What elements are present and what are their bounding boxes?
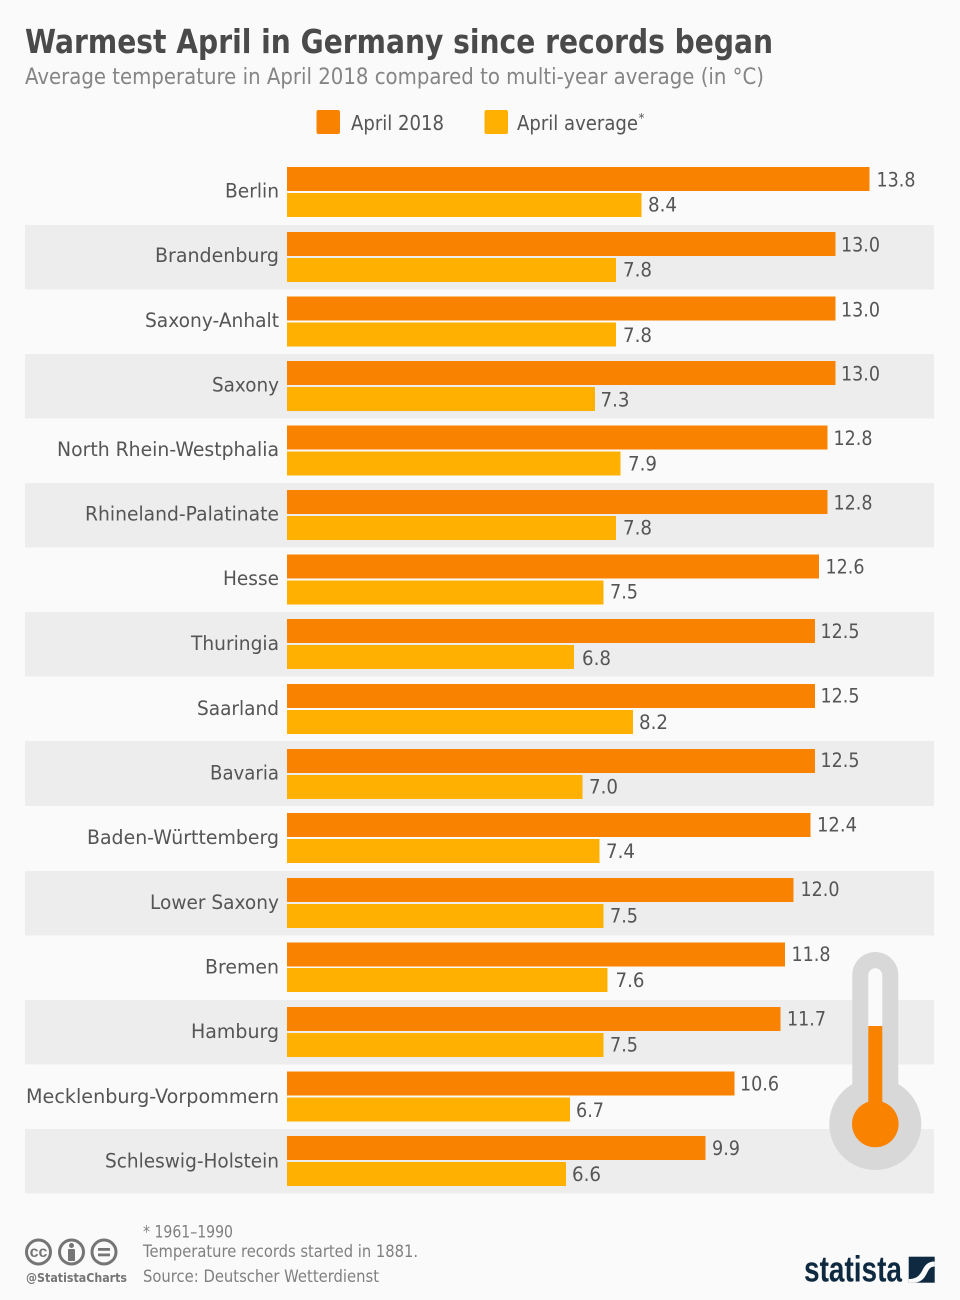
row: Saxony-Anhalt: Saxony-Anhalt [145, 309, 279, 332]
icon: thermometer [829, 952, 921, 1170]
row: Rhineland-Palatinate: Rhineland-Palatinate [85, 502, 279, 526]
row: Saarland: 12.5 [820, 684, 860, 708]
row: Baden-Württemberg: Baden-Württemberg [87, 826, 279, 849]
row: Bavaria: Bavaria [210, 762, 279, 784]
row: Lower Saxony [150, 878, 840, 928]
row: Lower Saxony: Lower Saxony [150, 891, 279, 914]
icon: creative commons badges: cc [30, 1244, 48, 1261]
row: Saarland: Saarland [197, 697, 279, 720]
legend: April average [517, 111, 638, 135]
row: Brandenburg: 7.8 [623, 258, 652, 282]
row: Thuringia: 6.8 [582, 647, 611, 670]
row: Saxony [212, 361, 880, 412]
footnotes: * 1961–1990 [143, 1222, 233, 1242]
row: Baden-Württemberg [87, 813, 857, 863]
row: Saxony-Anhalt [145, 296, 880, 347]
row: Lower Saxony: 12.0 [800, 878, 840, 901]
row: Mecklenburg-Vorpommern: 10.6 [740, 1072, 779, 1096]
row: Bremen: 7.6 [616, 969, 644, 992]
row: North Rhein-Westphalia: 7.9 [628, 452, 657, 476]
row: Baden-Württemberg: 7.4 [606, 840, 635, 863]
row: Schleswig-Holstein: Schleswig-Holstein [105, 1150, 279, 1172]
row: Rhineland-Palatinate: 12.8 [834, 492, 872, 514]
row: Hamburg: 7.5 [610, 1034, 638, 1056]
row: Brandenburg [155, 232, 880, 282]
row: Saxony-Anhalt: 7.8 [623, 324, 652, 347]
row: Bremen: 11.8 [792, 943, 830, 966]
row: Hesse: 7.5 [610, 580, 638, 604]
row: Hesse: Hesse [223, 567, 279, 590]
legend [316, 110, 644, 135]
row: Bremen [205, 942, 830, 992]
row: Thuringia: 12.5 [820, 620, 860, 643]
row: Schleswig-Holstein [105, 1136, 740, 1186]
row: Rhineland-Palatinate [85, 490, 872, 540]
legend: * [638, 111, 644, 125]
row: Saxony: 7.3 [600, 388, 630, 412]
row: Saxony-Anhalt: 13.0 [841, 298, 880, 322]
row: Baden-Württemberg: 12.4 [817, 814, 857, 836]
row: Lower Saxony: 7.5 [610, 904, 638, 928]
row stripes [25, 225, 934, 1194]
subtitle: Average temperature in April 2018 compared to multi-year average (in °C) [25, 65, 764, 90]
row: Berlin: Berlin [225, 180, 279, 202]
bar chart [26, 167, 916, 1186]
row: North Rhein-Westphalia [57, 426, 872, 476]
row: Bavaria: 12.5 [820, 749, 860, 772]
row: Rhineland-Palatinate: 7.8 [623, 516, 652, 540]
row: Mecklenburg-Vorpommern: 6.7 [576, 1099, 604, 1122]
row: Berlin [225, 167, 916, 217]
row: Hamburg [191, 1007, 826, 1057]
row: Thuringia [190, 619, 859, 670]
row: Mecklenburg-Vorpommern: Mecklenburg-Vorpommern [26, 1085, 279, 1108]
row: Bavaria: 7.0 [589, 776, 618, 798]
icon: creative commons badges [26, 1240, 116, 1264]
row: Hesse [223, 554, 864, 604]
row: Saxony: Saxony [212, 374, 279, 396]
row: Schleswig-Holstein: 6.6 [572, 1163, 601, 1186]
row: Bavaria [210, 749, 860, 799]
row: Saarland: 8.2 [639, 711, 668, 734]
legend: April 2018 [351, 111, 444, 135]
footnotes: Source: Deutscher Wetterdienst [143, 1267, 379, 1286]
row: Hesse: 12.6 [826, 556, 864, 578]
row: Brandenburg: 13.0 [841, 234, 880, 256]
row: Berlin: 13.8 [876, 168, 916, 192]
row: North Rhein-Westphalia: 12.8 [834, 427, 872, 450]
row: Mecklenburg-Vorpommern [26, 1072, 779, 1122]
title: Warmest April in Germany since records began [25, 23, 773, 61]
row: North Rhein-Westphalia: North Rhein-Westphalia [57, 438, 279, 461]
row: Bremen: Bremen [205, 956, 279, 978]
social handle: @StatistaCharts [26, 1270, 127, 1285]
row: Thuringia: Thuringia [190, 632, 279, 655]
row: Schleswig-Holstein: 9.9 [712, 1137, 740, 1160]
row: Berlin: 8.4 [648, 194, 677, 216]
row: Hamburg: 11.7 [787, 1008, 826, 1030]
footnotes [142, 1222, 418, 1286]
footnotes: Temperature records started in 1881. [142, 1242, 418, 1261]
row: Saarland [197, 684, 860, 734]
statista logo: statista [804, 1248, 903, 1290]
row: Brandenburg: Brandenburg [155, 244, 279, 267]
row: Hamburg: Hamburg [191, 1020, 279, 1043]
row: Saxony: 13.0 [841, 362, 880, 386]
